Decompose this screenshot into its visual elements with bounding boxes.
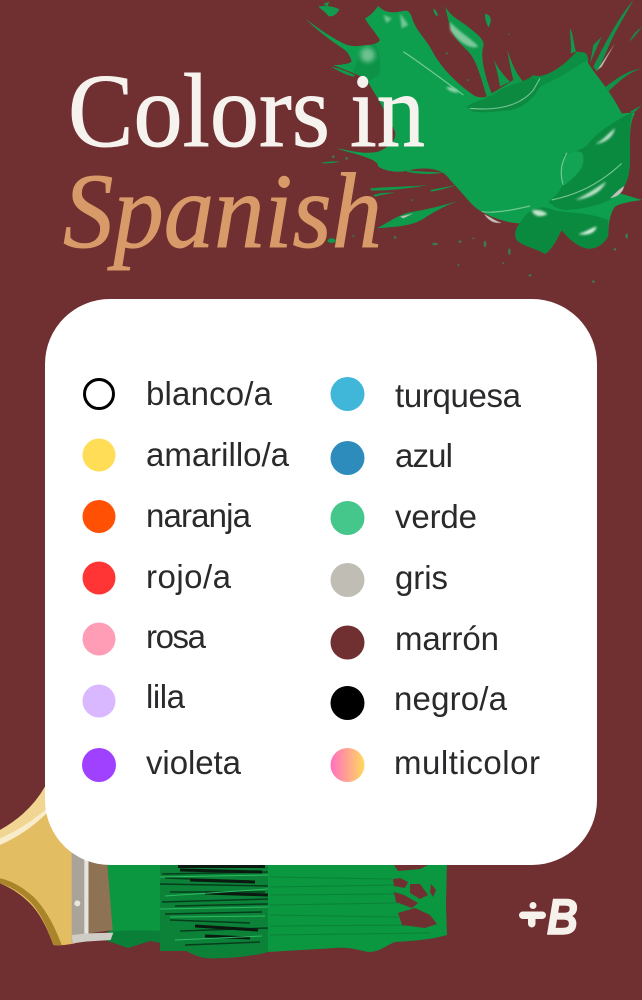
item: turquesa (330, 377, 522, 414)
shaded ridges (548, 112, 633, 210)
item: amarillo/a (82, 436, 290, 473)
logo: B (547, 889, 578, 945)
item: multicolor (330, 744, 540, 782)
item: rojo/a (82, 558, 232, 595)
dry brush gaps (393, 865, 437, 928)
item: verde (330, 498, 477, 535)
droplets (332, 34, 628, 283)
item: marrón (330, 620, 499, 660)
gloss highlights (383, 13, 615, 235)
item: turquesa: turquesa (395, 377, 522, 414)
item: violeta: violeta (146, 744, 242, 781)
paint brush stroke (105, 860, 447, 958)
item: violeta (82, 744, 242, 782)
item: blanco/a: blanco/a (146, 375, 273, 412)
item: negro/a (330, 680, 508, 720)
color list right column (330, 377, 540, 782)
title (63, 52, 425, 271)
title line: Spanish: Spanish (63, 153, 382, 271)
paint splash illustration (305, 0, 642, 283)
item: rosa (82, 618, 207, 656)
item: multicolor: multicolor (394, 744, 540, 781)
item: negro/a: negro/a (394, 680, 508, 717)
item: gris: gris (395, 559, 448, 596)
item: gris (330, 559, 448, 597)
color list left column (82, 375, 290, 782)
title word: in: in (350, 52, 425, 169)
item: rosa: rosa (146, 618, 207, 655)
item: azul (330, 437, 453, 475)
title line: Colors in: Colors (68, 52, 330, 169)
item: lila: lila (146, 678, 186, 715)
paint brush (0, 787, 113, 945)
logo (519, 889, 578, 945)
item: naranja: naranja (146, 497, 252, 534)
item: azul: azul (395, 437, 453, 474)
item: lila (82, 678, 186, 718)
item: marrón: marrón (395, 620, 499, 657)
item: verde: verde (395, 498, 477, 535)
item: rojo/a: rojo/a (146, 558, 232, 595)
item: amarillo/a: amarillo/a (146, 436, 290, 473)
card panel (45, 299, 597, 865)
item: blanco/a (84, 375, 273, 412)
item: naranja (82, 497, 252, 534)
